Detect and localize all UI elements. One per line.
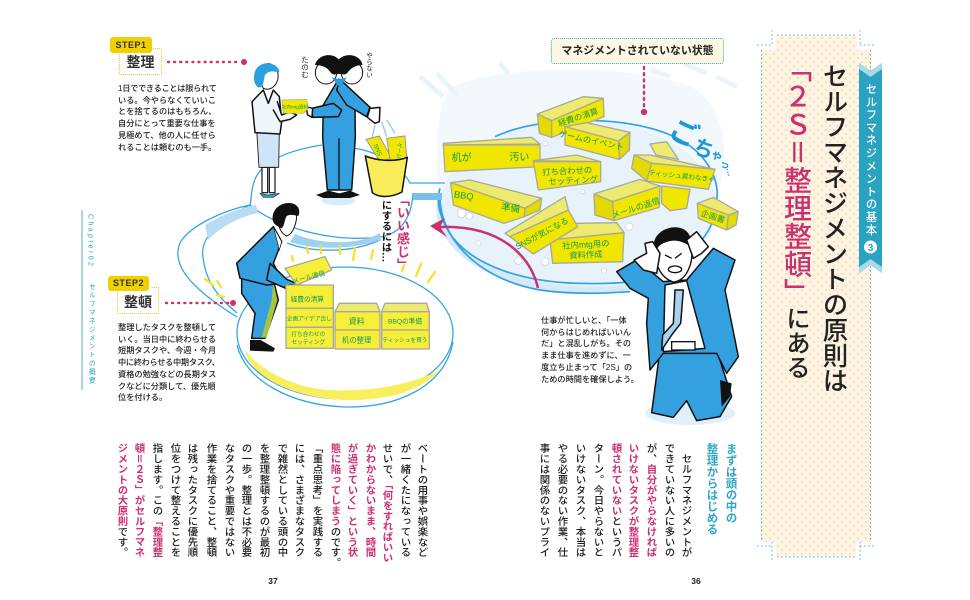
step 1 text: いる。今やらなくていいこ xyxy=(118,96,216,105)
subheading line two: 整理からはじめる xyxy=(706,443,718,535)
label: unmanaged state xyxy=(551,38,724,64)
column two: 机の整理 xyxy=(342,336,372,345)
boxes: unmanaged tasks xyxy=(443,97,738,273)
box: desk: 机が xyxy=(452,151,472,164)
step 1 text: 1日でできることは限られて xyxy=(118,84,216,93)
body text: page 37: が過ぎていく」という状 xyxy=(345,443,356,557)
person: two-faced man xyxy=(306,55,395,205)
title: line one: セルフマネジメントの原則は xyxy=(819,63,847,393)
label: yaranai: やらない xyxy=(364,52,373,78)
bucket: discarded tasks xyxy=(365,136,407,196)
step 1 tag xyxy=(119,48,162,75)
step 2 text: クなどに分類して、優先順 xyxy=(118,382,216,391)
box: expense xyxy=(537,97,604,137)
body text: page 36: が、 自分がやらなければ xyxy=(644,443,655,557)
body text: page 36: いけないタスクが整理整 xyxy=(626,443,637,557)
box: planning document xyxy=(697,197,738,230)
step 2 badge: STEP2 xyxy=(113,278,144,288)
page number 36: 36 xyxy=(691,576,701,586)
body text: page 36: 頓されていない というパ xyxy=(609,443,620,557)
body text: page 36: 事には関係のないプライ xyxy=(537,443,548,557)
step 2 text: 中に終わらせる中期タスク、 xyxy=(118,358,220,367)
box: bbq: BBQ xyxy=(453,189,474,202)
step 1 text xyxy=(118,84,216,152)
plate: organized glow xyxy=(205,246,440,400)
column three xyxy=(382,303,429,349)
page number 37: 37 xyxy=(268,576,278,586)
box: planning document: 企画書 xyxy=(699,208,726,225)
callout: to make it feel good xyxy=(379,193,410,271)
column one: 経費の清算 xyxy=(291,295,324,304)
onomatopoeia: gochaa: … xyxy=(724,166,736,177)
box: mail reply: メールの返信 xyxy=(610,195,661,220)
step 2 text: 資格の勉強などの長期タス xyxy=(118,370,216,379)
subheading line one: まずは頭の中の xyxy=(724,443,736,524)
body text: page 36: できていない人に多いの xyxy=(662,443,673,557)
step 1 text: 見極めて、他の人に任せら xyxy=(118,131,216,140)
box: internal document: 資料作成 xyxy=(569,249,603,261)
label: unmanaged state: マネジメントされていない状態 xyxy=(561,45,714,57)
band: plate thickness xyxy=(205,193,442,248)
panel: title background xyxy=(757,30,875,562)
step 2 text: 短期タスクや、今週・今月 xyxy=(118,346,216,355)
ribbon: plate connector xyxy=(178,145,453,407)
body text: page 37: 指します。この 「整理整 xyxy=(150,443,161,557)
box: mail reply tilted xyxy=(285,257,332,286)
box: meeting setup: セッティング xyxy=(548,174,598,187)
label: tanomu: たのむ xyxy=(300,56,310,79)
leader: step 2 xyxy=(166,300,236,306)
box: bbq xyxy=(451,180,542,223)
column one: セッティング xyxy=(292,338,325,346)
column one: 打ち合わせの xyxy=(291,330,326,338)
step 2 text xyxy=(118,323,220,402)
box: social media: SNSが気になる xyxy=(514,215,570,252)
box: social media xyxy=(505,197,578,254)
box: expense: 経費の清算 xyxy=(557,106,599,128)
arrow: from messy to organized xyxy=(430,218,538,288)
caption: confusion note: だ」と混乱しがち。その xyxy=(541,339,631,348)
box: internal document xyxy=(550,223,624,263)
boxes: organized tasks xyxy=(285,257,429,349)
ribbon: series label: 3 xyxy=(868,243,874,254)
step 1 badge: STEP1 xyxy=(115,40,146,50)
body text: page 37: かわからないまま、時間 xyxy=(363,443,374,557)
box: handed task xyxy=(282,99,309,113)
body text: page 37: 作業を捨てること、整頓 xyxy=(204,443,215,557)
box: tissue: ティッシュ買わなきゃ xyxy=(649,169,715,184)
box: desk xyxy=(443,137,540,172)
caption: confusion note: ための時間を確保しよう。 xyxy=(541,375,639,384)
step 1 badge xyxy=(110,37,152,53)
step 2 tag xyxy=(117,287,159,314)
column three: BBQの準備 xyxy=(388,316,422,325)
box: mail reply xyxy=(594,179,661,221)
box: meeting setup: 打ち合わせの xyxy=(542,165,592,177)
body text: page 37: は残ったタスクに優先順 xyxy=(185,443,196,557)
caption: confusion note: まま仕事を進めずに、一 xyxy=(541,351,631,360)
column two: 資料 xyxy=(349,316,365,326)
box: meeting setup xyxy=(533,155,601,190)
caption: confusion note: 仕事が忙しいと、「一体 xyxy=(541,316,627,325)
body text: page 37: せいで、 「何をすればいい xyxy=(380,443,391,563)
step 1 text: とを捨てるのはもちろん、 xyxy=(118,107,216,116)
onomatopoeia: gochaa: ご xyxy=(664,112,703,153)
box: bbq: 準備 xyxy=(500,201,520,214)
plate: messy state xyxy=(420,63,737,293)
callout line pink: 「いい感じ」 xyxy=(395,193,410,271)
step 2 heading: seiton: 整頓 xyxy=(124,294,152,310)
step 1 heading: seiri: 整理 xyxy=(126,54,154,70)
body text: page 37: が一緒くたになっている xyxy=(398,443,409,557)
box: desk: 汚い xyxy=(509,151,529,164)
box: handed task: 社内mtg資料 xyxy=(282,104,309,111)
column two xyxy=(335,303,380,349)
body text: page 37: 位をつけて整えることを xyxy=(168,443,179,557)
onomatopoeia: gochaa: ち xyxy=(689,135,718,164)
column one xyxy=(286,285,333,348)
person: panicking man xyxy=(617,227,738,425)
subheading: start from the head xyxy=(706,443,738,535)
bucket: discarded tasks: ゲーム xyxy=(395,143,403,159)
body text: page 37: ジメントの大原則 です。 xyxy=(115,443,126,557)
leader: unmanaged state xyxy=(641,67,647,115)
leader: step 1 xyxy=(168,59,247,65)
body text: page 37: 頓＝２Ｓ」がセルフマネ xyxy=(132,443,143,557)
step 2 text: いく。当日中に終わらせる xyxy=(118,335,216,344)
body text: page 36 xyxy=(537,443,692,557)
body text: page 37: 「重点思考」を実践する xyxy=(310,443,321,557)
chapter text: Chapter02 xyxy=(86,214,94,268)
caption: confusion note xyxy=(541,316,639,384)
column three: ティッシュを買う xyxy=(383,337,427,344)
onomatopoeia: gochaa: っ xyxy=(718,158,732,173)
box: small cube xyxy=(662,186,690,211)
ribbon text: セルフマネジメントの基本 xyxy=(864,83,876,237)
side label: chapter xyxy=(81,210,97,390)
title: line two: 「２Ｓ＝整理整頓」 にある xyxy=(781,54,812,380)
body text: page 37: を整理整頓するのが最初 xyxy=(257,443,268,557)
dust clouds xyxy=(457,141,633,273)
onomatopoeia: gochaa: ゃ xyxy=(708,146,726,165)
body text: page 37: ベートの用事や娯楽など xyxy=(415,443,426,557)
box: internal document: 社内mtg用の xyxy=(562,238,610,251)
chapter title: セルフマネジメントの概要 xyxy=(87,283,94,385)
box: tissue xyxy=(632,155,715,189)
box: game event: ゲームのイベント xyxy=(558,129,625,152)
step 1 text: れることは頼むのも一手。 xyxy=(118,143,216,152)
column one: 企画アイデア出し xyxy=(287,315,332,323)
body text: page 37: 態に陥ってしまう のです。 xyxy=(328,443,339,568)
body text: page 36: やる必要のない作業、仕 xyxy=(555,443,566,557)
body text: page 37: の一歩。整理とは不必要 xyxy=(239,443,250,557)
caption: confusion note: 何からはじめればいいん xyxy=(541,328,631,337)
box: game event xyxy=(558,123,630,159)
step 2 badge xyxy=(108,276,149,291)
step 2 text: 位を付ける。 xyxy=(118,393,167,402)
box: upper small xyxy=(650,142,678,159)
body text: page 37 xyxy=(115,443,428,568)
caption: confusion note: 度立ち止まって「2S」の xyxy=(541,363,632,372)
person: man organizing xyxy=(237,203,300,352)
bucket: discarded tasks: SNS xyxy=(372,143,382,157)
onomatopoeia: gochaa xyxy=(664,112,736,177)
body text: page 37: で雑然としている頭の中 xyxy=(275,443,286,557)
callout line black: にするには… xyxy=(379,200,390,262)
step 2 text: 整理したタスクを整頓して xyxy=(118,323,216,332)
body text: page 36: ターン。今日やらないと xyxy=(591,443,602,557)
step 1 text: 自分にとって重要な仕事を xyxy=(118,119,216,128)
box: mail reply tilted: メール通信 xyxy=(291,268,326,286)
body text: page 37: には、さまざまなタスク xyxy=(292,443,303,557)
person: woman handing box xyxy=(252,63,297,197)
body text: page 36: セルフマネジメントが xyxy=(679,453,690,557)
body text: page 37: なタスクや重要ではない xyxy=(222,443,233,557)
body text: page 36: いけないタスク、本当は xyxy=(573,443,584,557)
